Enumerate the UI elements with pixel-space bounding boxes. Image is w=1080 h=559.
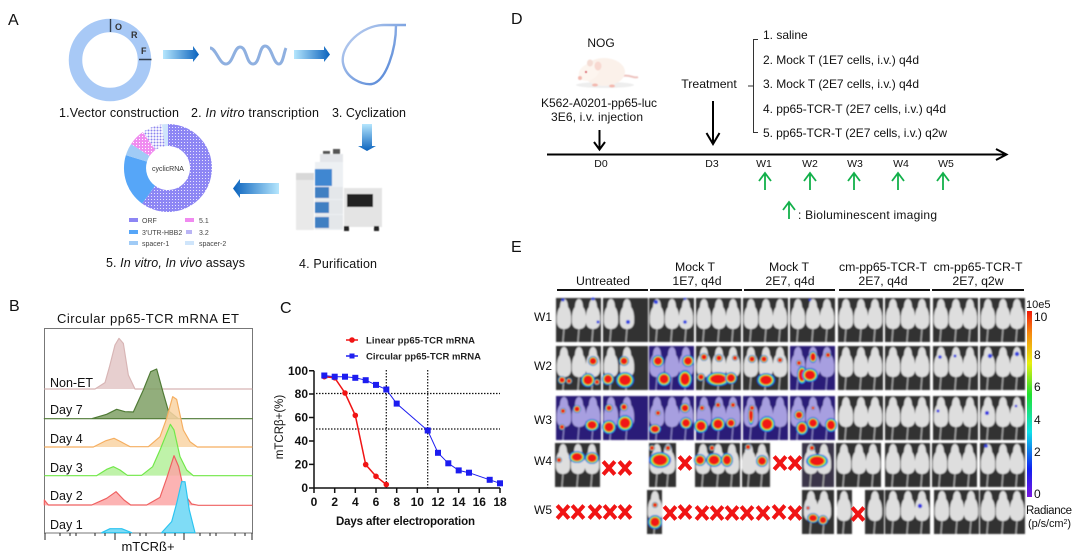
- icon: white mouse: [575, 58, 638, 88]
- icon: vector ring: R: [131, 30, 138, 40]
- colorbar: radiance scale: 2: [1034, 445, 1041, 459]
- colorbar: radiance scale: 2: [1064, 519, 1068, 526]
- labels: time points: W1: [756, 158, 772, 170]
- panel letter A: A: [8, 12, 19, 29]
- histogram: Day 7: [44, 369, 252, 419]
- chart title: Circular pp65-TCR mRNA ET: [57, 311, 239, 326]
- panel D: experiment timeline: [511, 11, 1006, 222]
- group headers: [576, 260, 1023, 288]
- chart: axes: 4: [352, 495, 359, 509]
- labels: sample names: Day 7: [50, 403, 83, 417]
- arrow: treatment at D3: [706, 101, 720, 144]
- legend: donut: 5.1: [199, 218, 209, 225]
- histogram plot: [44, 328, 253, 540]
- colorbar: radiance scale: 6: [1034, 380, 1041, 394]
- list: treatment groups: [763, 28, 947, 140]
- row labels: W1: [534, 310, 552, 324]
- chart: axes: 6: [373, 495, 380, 509]
- chart: axes: 16: [473, 495, 486, 509]
- group headers: cm-pp65-TCR-T: [934, 260, 1023, 274]
- x axis title: Days after electroporation: [336, 516, 475, 528]
- chart: donut composition: cyclicRNA: [152, 166, 184, 173]
- images: week 2: [556, 346, 1025, 390]
- icon: vector ring: F: [141, 46, 147, 56]
- arrow: vector to transcription: [163, 46, 199, 62]
- panel E: bioluminescent imaging grid: [511, 239, 1072, 534]
- chart: axes: 8: [393, 495, 400, 509]
- colorbar: radiance scale: 4: [1034, 413, 1041, 427]
- colorbar: radiance scale: Radiance: [1026, 505, 1072, 517]
- arrow: injection at D0: [594, 130, 605, 150]
- chart: axes: [288, 364, 507, 509]
- labels: time points: D0: [594, 158, 608, 170]
- label: step 4: 4. Purification: [299, 257, 377, 271]
- series: linear mRNA: [322, 374, 389, 487]
- group headers: cm-pp65-TCR-T: [839, 260, 927, 274]
- chart: axes: 12: [431, 495, 445, 509]
- row labels: [534, 310, 552, 517]
- list: treatment groups: 2. Mock T (1E7 cells, i.v.) q4d: [763, 53, 919, 67]
- chart: axes: 14: [452, 495, 466, 509]
- legend: donut: spacer-2: [199, 241, 226, 248]
- header rules: [557, 289, 1024, 291]
- group headers: Untreated: [576, 274, 630, 288]
- arrow: purification to assays: [233, 179, 279, 198]
- arrow: timeline axis: [547, 149, 1006, 160]
- labels: sample names: Day 1: [50, 518, 83, 532]
- label: tumor cell injection: 3E6, i.v. injection: [551, 110, 643, 124]
- labels: sample names: Day 4: [50, 432, 83, 446]
- chart: axes: 10: [411, 495, 424, 509]
- histogram axis ticks: [45, 533, 252, 540]
- bracket: treatment groups: [748, 40, 758, 132]
- group headers: Mock T: [675, 260, 716, 274]
- chart: axes: 0: [301, 481, 308, 495]
- labels: time points: D3: [705, 158, 719, 170]
- group headers: Mock T: [769, 260, 810, 274]
- histogram: Day 3: [44, 424, 252, 476]
- series: circular mRNA: [321, 372, 503, 486]
- legend: donut: spacer-1: [142, 241, 169, 248]
- label: tumor cell injection: [541, 96, 657, 124]
- panel A: circular mRNA workflow: [8, 12, 406, 271]
- arrows: imaging time points: [759, 173, 949, 190]
- labels: time points: W4: [893, 158, 909, 170]
- colorbar: radiance scale: 10: [1034, 310, 1048, 324]
- panel letter D: D: [511, 11, 523, 28]
- panel C: persistence line chart: [274, 300, 507, 528]
- chart: donut composition: [124, 124, 212, 212]
- list: treatment groups: 5. pp65-TCR-T (2E7 cells, i.v.) q2w: [763, 126, 947, 140]
- images: week 1: [556, 298, 1025, 342]
- images: week 3: [556, 396, 1025, 440]
- legend: [346, 336, 481, 362]
- legend: bioluminescent imaging: [783, 202, 937, 222]
- label: Treatment: Treatment: [681, 77, 737, 91]
- legend: donut: 3'UTR-HBB2: [142, 230, 182, 237]
- labels: time points: W5: [938, 158, 954, 170]
- chart: axes: 0: [311, 495, 318, 509]
- legend: bioluminescent imaging: : Bioluminescent imaging: [798, 208, 937, 222]
- y axis title: mTCRβ+(%): [274, 395, 286, 459]
- label: step 5: 5. In vitro, In vivo assays: [106, 256, 245, 270]
- row labels: W4: [534, 454, 552, 468]
- group headers: 2E7, q4d: [858, 274, 908, 288]
- labels: time points: W2: [802, 158, 818, 170]
- row labels: W2: [534, 359, 552, 373]
- panel letter C: C: [280, 300, 292, 317]
- panel letter E: E: [511, 239, 522, 256]
- histogram: Non-ET: [44, 338, 252, 389]
- labels: sample names: Day 2: [50, 489, 83, 503]
- legend: donut: 3.2: [199, 230, 209, 237]
- label: step 2: 2. In vitro transcription: [191, 106, 319, 120]
- arrow: transcription to cyclization: [294, 46, 330, 62]
- list: treatment groups: 4. pp65-TCR-T (2E7 cells, i.v.) q4d: [763, 102, 946, 116]
- legend: Circular pp65-TCR mRNA: [366, 352, 481, 362]
- colorbar: radiance scale: [1026, 299, 1072, 530]
- images: week 5: [647, 490, 1025, 534]
- labels: sample names: [50, 376, 93, 532]
- histogram: Day 2: [44, 456, 252, 505]
- labels: sample names: Non-ET: [50, 376, 93, 390]
- labels: time points: [594, 158, 954, 170]
- chart: axes: 18: [493, 495, 507, 509]
- colorbar: radiance scale: (p/s/cm: [1028, 518, 1064, 530]
- icon: HPLC instrument: [296, 149, 382, 231]
- icon: vector ring: [76, 19, 152, 94]
- reference dotted lines: [316, 370, 500, 488]
- row labels: W5: [534, 503, 552, 517]
- group headers: 2E7, q2w: [952, 274, 1004, 288]
- row labels: W3: [534, 413, 552, 427]
- label: tumor cell injection: K562-A0201-pp65-luc: [541, 96, 657, 110]
- label: NOG: NOG: [587, 36, 615, 50]
- colorbar: radiance scale: ): [1067, 518, 1071, 530]
- icon: vector ring: O: [115, 22, 122, 32]
- chart: axes: 20: [295, 458, 308, 472]
- legend: donut: ORF: [142, 218, 157, 225]
- histogram: Day 1: [102, 482, 195, 533]
- group headers: 2E7, q4d: [765, 274, 815, 288]
- icon: linear mRNA wave: [210, 46, 286, 64]
- chart: axes: 80: [295, 387, 308, 401]
- legend: Linear pp65-TCR mRNA: [366, 336, 475, 346]
- colorbar: radiance scale: 0: [1034, 487, 1041, 501]
- markers: dead animals: [558, 458, 862, 519]
- icon: cyclized RNA loop: [343, 25, 406, 84]
- label: step 3: 3. Cyclization: [332, 106, 406, 120]
- list: treatment groups: 3. Mock T (2E7 cells, i.v.) q4d: [763, 77, 919, 91]
- histogram: Day 4: [44, 397, 252, 447]
- labels: time points: W3: [847, 158, 863, 170]
- labels: sample names: Day 3: [50, 461, 83, 475]
- chart: axes: 40: [295, 434, 308, 448]
- group headers: 1E7, q4d: [672, 274, 722, 288]
- images: week 4: [555, 443, 1025, 487]
- panel B: flow cytometry histograms: [9, 298, 252, 554]
- legend: donut: [129, 218, 226, 248]
- colorbar: radiance scale: 10e5: [1026, 299, 1050, 311]
- label: step 1: 1.Vector construction: [59, 106, 179, 120]
- colorbar: radiance scale: 8: [1034, 348, 1041, 362]
- chart: axes: 2: [331, 495, 338, 509]
- chart: axes: 60: [295, 410, 308, 424]
- chart: axes: 100: [288, 364, 308, 378]
- arrow: cyclization to purification: [358, 124, 376, 151]
- axis label: mTCRß+: [121, 539, 175, 554]
- list: treatment groups: 1. saline: [763, 28, 808, 42]
- panel letter B: B: [9, 298, 20, 315]
